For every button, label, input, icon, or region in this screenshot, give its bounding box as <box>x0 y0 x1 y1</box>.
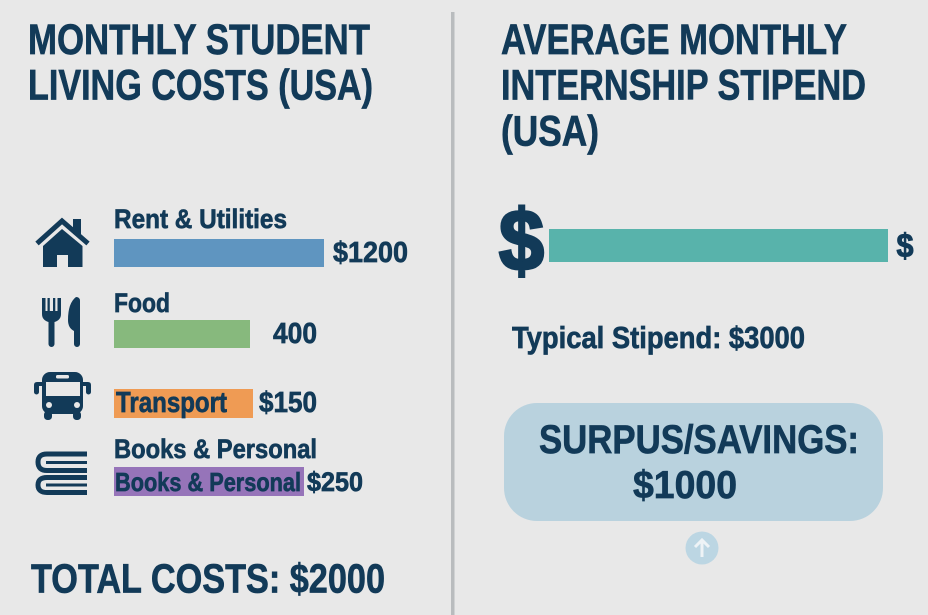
total costs: TOTAL COSTS: $2000 <box>31 556 385 602</box>
icon: fork and knife <box>42 297 80 347</box>
icon: house <box>37 219 88 267</box>
typical stipend label: Typical Stipend: $3000 <box>512 320 805 355</box>
callout: surplus savings: SURPUS/SAVINGS: <box>539 418 859 462</box>
stipend bar <box>549 229 888 262</box>
panel: living costs <box>28 16 408 602</box>
icon: dollar sign: $ <box>499 193 544 289</box>
panel: internship stipend <box>499 16 914 564</box>
row: transport <box>114 387 317 419</box>
small dollar label: $ <box>896 227 914 264</box>
row: transport: Transport <box>116 387 227 419</box>
row: books and personal <box>114 434 363 497</box>
heading: monthly student living costs: MONTHLY STUDENT <box>28 16 370 64</box>
callout: surplus savings: $1000 <box>633 464 737 507</box>
heading: monthly student living costs: LIVING COSTS (USA) <box>28 62 373 110</box>
icon: books <box>38 454 87 492</box>
heading: monthly student living costs <box>28 16 373 110</box>
row: food <box>114 288 317 350</box>
row: food: Food <box>114 288 170 318</box>
row: books and personal: Books & Personal <box>114 434 317 464</box>
row: rent and utilities <box>114 204 408 269</box>
row: food: 400 <box>273 318 317 350</box>
icon: up arrow <box>686 532 718 564</box>
heading: average monthly internship stipend: AVERAGE MONTHLY <box>501 16 847 64</box>
row: rent and utilities: Rent & Utilities <box>114 204 287 234</box>
row: transport: $150 <box>259 387 317 419</box>
row: books and personal: $250 <box>307 467 363 497</box>
icon: bus <box>34 372 91 420</box>
row: books and personal: Books & Personal <box>115 467 301 497</box>
heading: average monthly internship stipend <box>501 16 866 156</box>
heading: average monthly internship stipend: (USA) <box>501 108 599 156</box>
callout: surplus savings <box>504 403 883 521</box>
row: rent and utilities: $1200 <box>333 237 408 269</box>
